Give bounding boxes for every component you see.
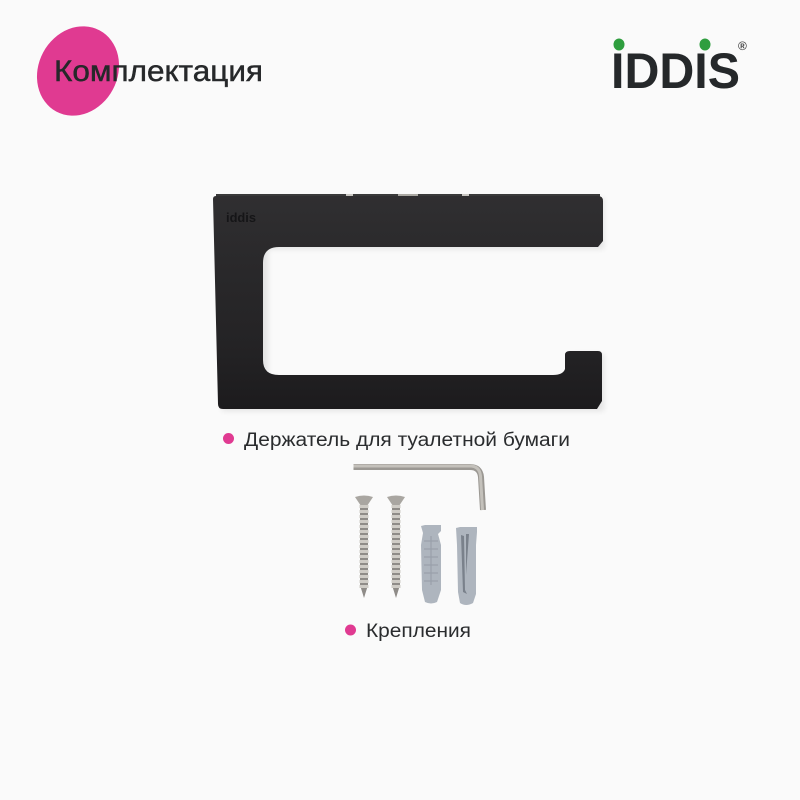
- logo green dots: [614, 38, 710, 50]
- holder top edge with metal clips: [216, 194, 600, 198]
- logo wordmark: IDDIS: [611, 43, 740, 99]
- label: holder: [223, 430, 570, 451]
- heading text: Комплектация: [54, 55, 263, 88]
- screw head: [387, 496, 405, 506]
- screw thread: [392, 505, 400, 589]
- engraved brand on holder: iddis: [226, 211, 256, 225]
- wall plug 1: [421, 525, 441, 604]
- registered mark: ®: [738, 39, 747, 53]
- screw shaft: [360, 505, 368, 598]
- screw 2: [387, 496, 405, 598]
- label text: Крепления: [366, 621, 471, 642]
- plug body: [456, 527, 477, 605]
- screw 1: [355, 496, 373, 598]
- screw shaft: [392, 505, 400, 598]
- plug ribs: [424, 536, 438, 585]
- hex key: [354, 466, 483, 510]
- plug body: [421, 525, 441, 604]
- wall plug 2: [456, 527, 477, 605]
- screw head: [355, 496, 373, 506]
- holder body: [213, 196, 603, 409]
- screw thread: [360, 505, 368, 589]
- plug slit: [461, 534, 469, 594]
- logo: IDDIS: [611, 38, 747, 99]
- heading: Комплектация with pink blob: [22, 12, 263, 130]
- label: fasteners: [345, 621, 471, 642]
- pink blob: [22, 12, 134, 130]
- product: black toilet paper holder: [213, 194, 604, 411]
- bullet: [223, 433, 234, 444]
- label text: Держатель для туалетной бумаги: [244, 430, 570, 451]
- bullet: [345, 624, 356, 636]
